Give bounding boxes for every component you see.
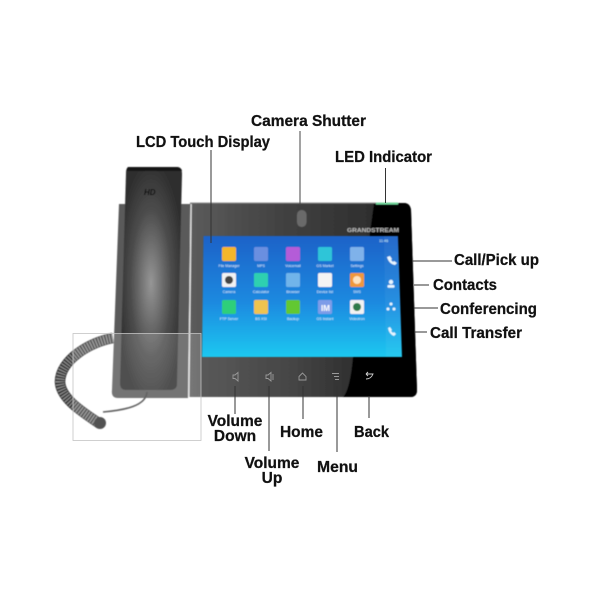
row 2 apps: SMS bbox=[353, 290, 361, 294]
handset top edge bbox=[127, 167, 182, 171]
LCD screen bbox=[202, 236, 402, 357]
black right panel bbox=[343, 203, 417, 397]
label: menu: Menu bbox=[317, 459, 358, 476]
translucent box over cord bbox=[73, 334, 201, 440]
row 3 apps: Videotron bbox=[349, 317, 365, 321]
lower bezel bbox=[198, 357, 417, 397]
label: volume down: Down bbox=[214, 428, 256, 445]
row 3 apps: BS XSI bbox=[255, 317, 267, 321]
row 2 apps: Camera bbox=[223, 290, 235, 294]
side bar bbox=[384, 236, 402, 357]
brand text: GRANDSTREAM bbox=[347, 228, 399, 234]
row 3 apps: IM bbox=[321, 304, 330, 313]
label: volume down: Volume bbox=[208, 413, 262, 430]
home key bbox=[299, 373, 306, 380]
side icons bbox=[386, 256, 397, 336]
chrome strip bbox=[188, 204, 192, 397]
HD logo: HD bbox=[144, 188, 156, 197]
back key bbox=[366, 372, 373, 379]
handset bbox=[120, 167, 182, 390]
coiled cord bbox=[60, 338, 147, 429]
row 2 apps bbox=[222, 273, 364, 294]
status bar: 11:46 bbox=[379, 239, 388, 243]
label: lcd touch display: LCD Touch Display bbox=[136, 134, 270, 151]
row 1 apps: File Manager bbox=[219, 264, 240, 268]
label: conferencing: Conferencing bbox=[440, 301, 537, 318]
menu key bbox=[332, 374, 339, 380]
label: home: Home bbox=[280, 424, 323, 441]
row 1 apps: MPS bbox=[257, 264, 265, 268]
row 3 apps: Backup bbox=[287, 317, 299, 321]
leader lines bbox=[211, 131, 452, 452]
thin cord bbox=[103, 392, 147, 412]
row 1 apps bbox=[219, 247, 364, 268]
row 1 apps: Settings bbox=[350, 264, 364, 268]
cradle bbox=[112, 204, 190, 398]
row 2 apps: Device list bbox=[317, 290, 333, 294]
row 2 apps: Browser bbox=[286, 290, 300, 294]
row 3 apps: GS Instant bbox=[317, 317, 333, 321]
label: volume up: Up bbox=[262, 470, 282, 487]
phone illustration bbox=[60, 167, 417, 429]
row 1 apps: Voicemail bbox=[285, 264, 301, 268]
row 2 apps: Calculator bbox=[253, 290, 270, 294]
labels bbox=[136, 113, 539, 487]
phone body bbox=[188, 203, 417, 397]
bottom touch keys bbox=[233, 372, 373, 381]
volume up key bbox=[266, 372, 273, 381]
LED indicator bbox=[376, 202, 398, 204]
camera shutter bbox=[297, 210, 306, 227]
body top highlight bbox=[190, 202, 376, 204]
row 3 apps bbox=[220, 300, 365, 321]
row 3 apps: FTP Server bbox=[220, 317, 239, 321]
label: volume up: Volume bbox=[245, 455, 299, 472]
label: led indicator: LED Indicator bbox=[335, 149, 432, 166]
label: call transfer: Call Transfer bbox=[430, 325, 522, 342]
row 1 apps: GS Market bbox=[316, 264, 334, 268]
label: back: Back bbox=[354, 424, 389, 441]
volume down key bbox=[233, 372, 238, 381]
label: camera shutter: Camera Shutter bbox=[251, 113, 366, 130]
label: contacts: Contacts bbox=[433, 277, 497, 294]
label: call/pick up: Call/Pick up bbox=[454, 252, 539, 269]
